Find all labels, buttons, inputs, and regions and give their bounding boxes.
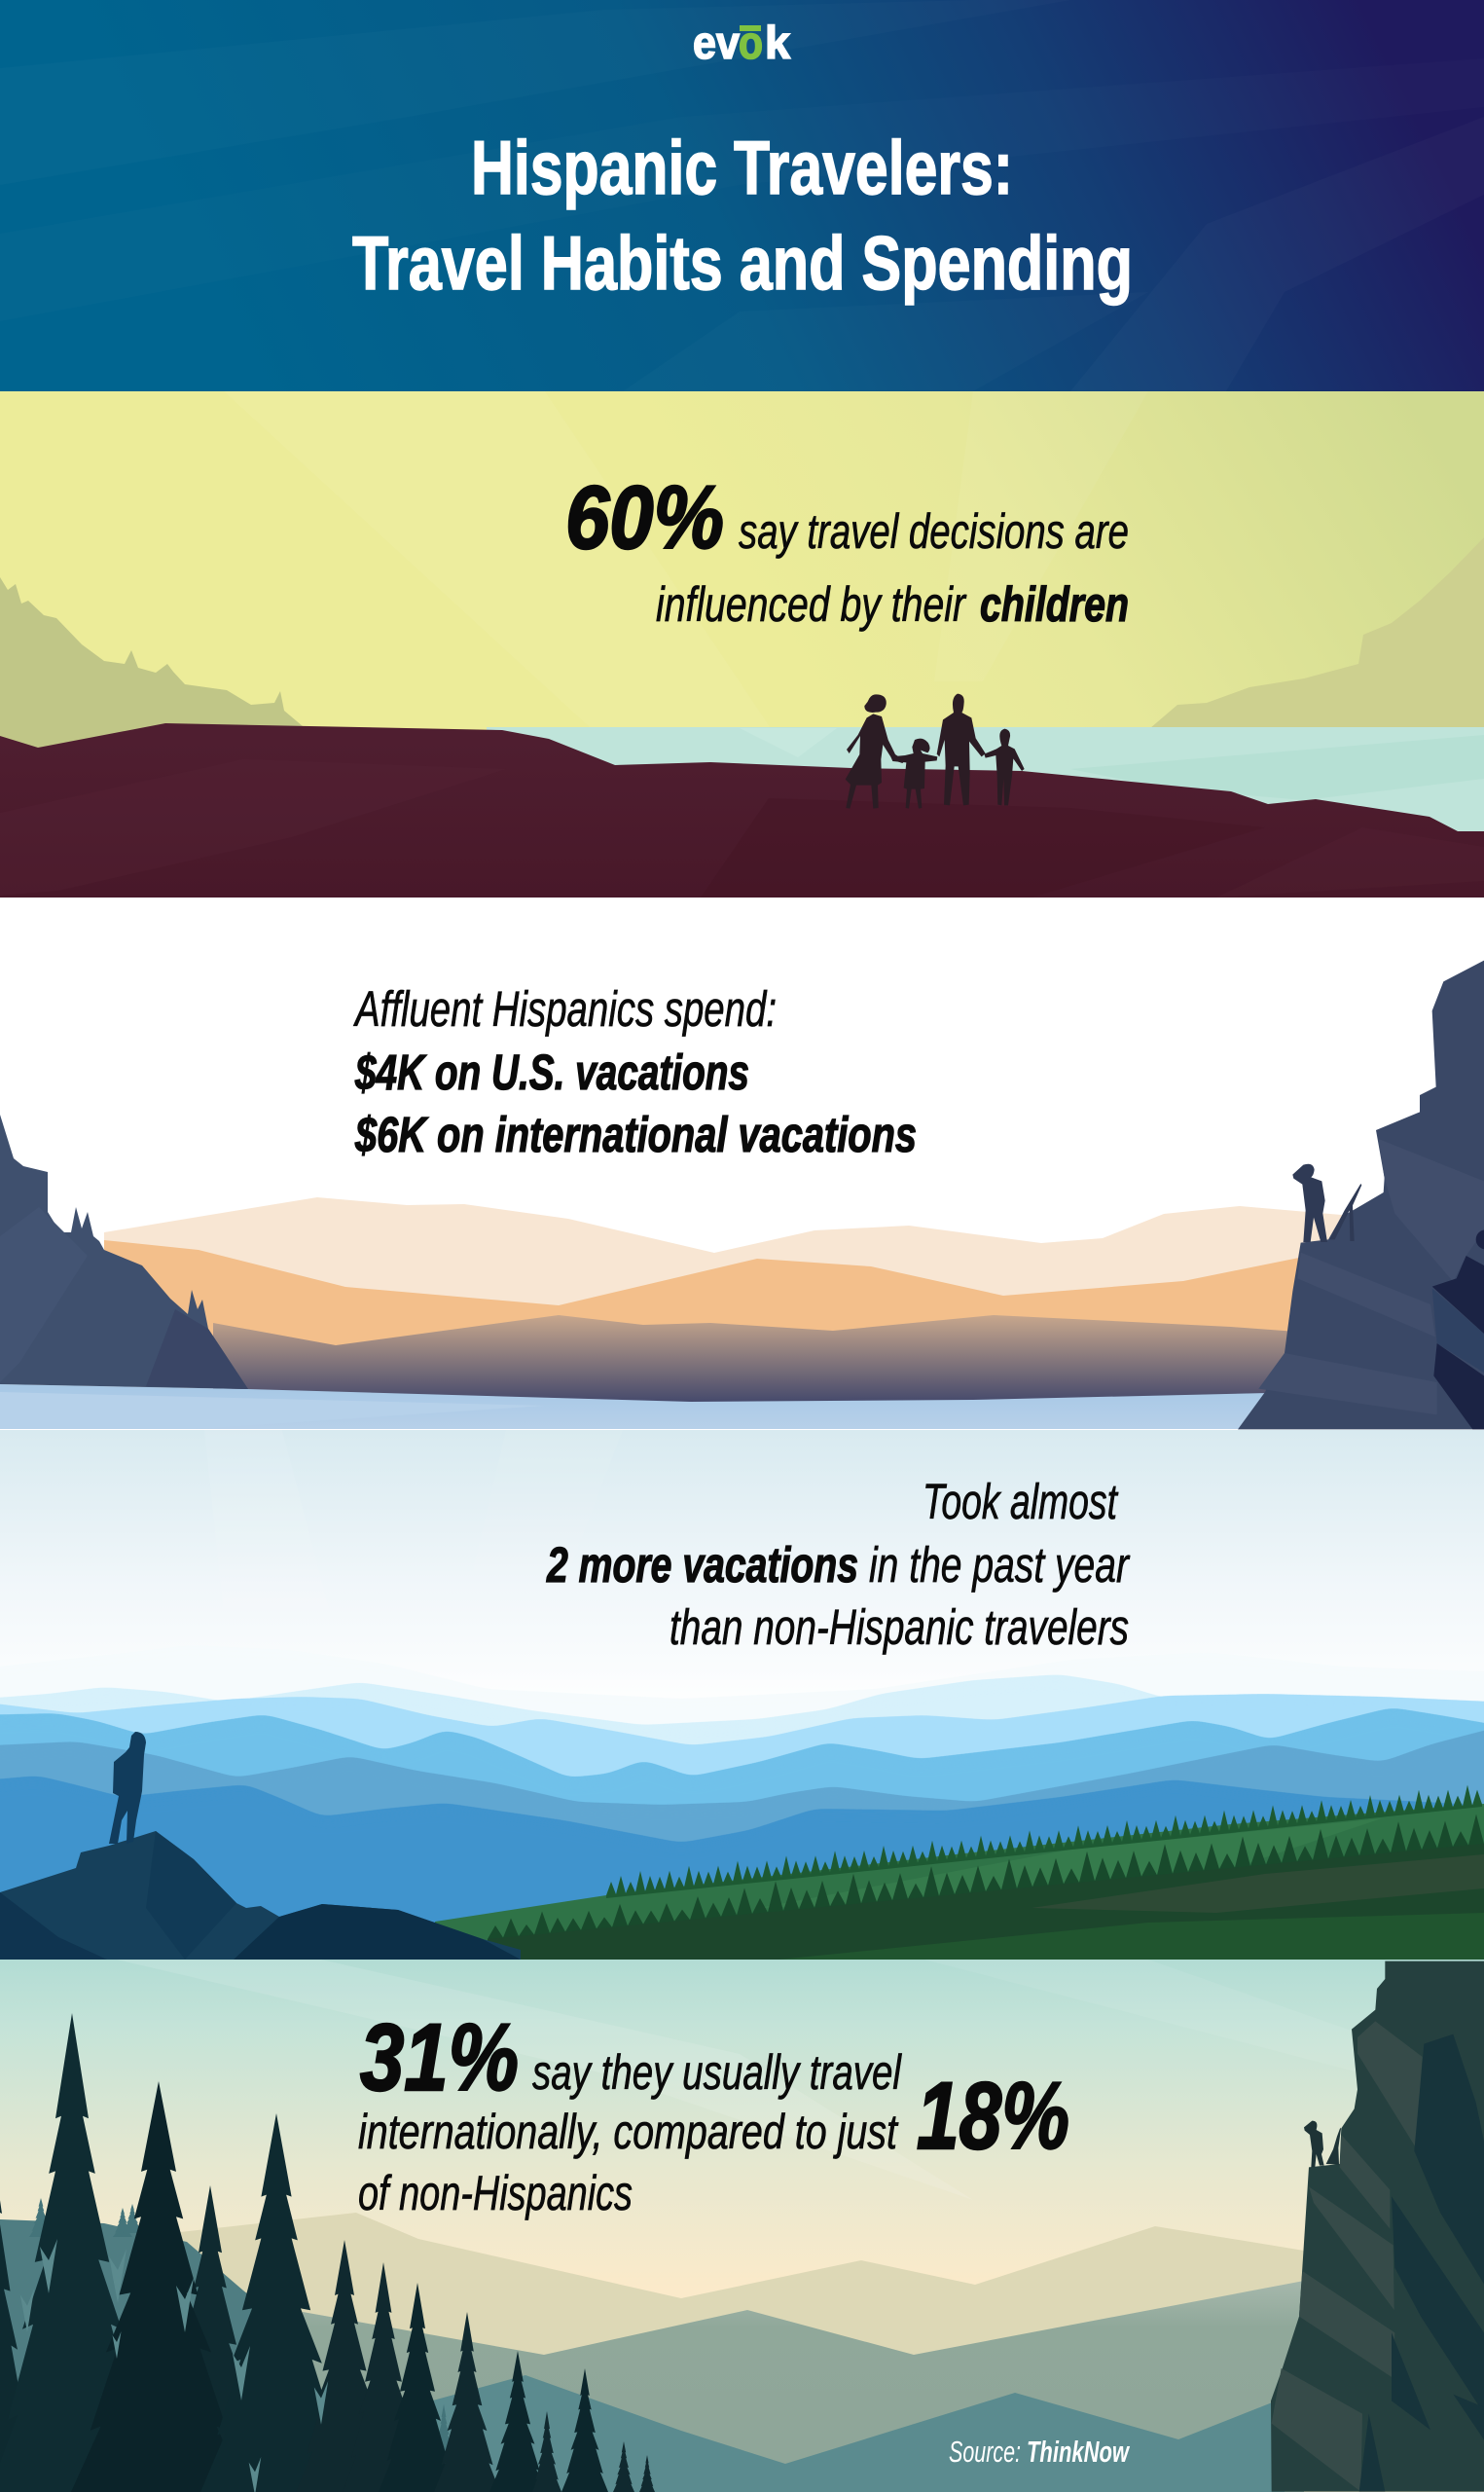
stat text: vacations: [546, 1474, 1131, 1655]
stat text: spending: $6K on international vacations: [354, 1107, 917, 1162]
light branch tips: [20, 2239, 328, 2492]
right rock face: [1271, 1961, 1484, 2492]
logo: evok: ev: [693, 17, 740, 68]
stat text: international travel: of non-Hispanics: [358, 2166, 633, 2220]
panel: header: [0, 0, 1484, 391]
header light streaks: [0, 0, 1484, 391]
stat text: vacations: than non-Hispanic travelers: [670, 1599, 1129, 1655]
title: Travel Habits and Spending: [352, 220, 1133, 306]
stat text: 60% children: [565, 468, 1129, 632]
stat text: 60% children: children: [980, 577, 1129, 632]
stat text: vacations: in the past year: [869, 1537, 1131, 1593]
stat text: international travel: 18%: [917, 2063, 1069, 2169]
background pines: [29, 2198, 455, 2463]
source note: Source:: [949, 2435, 1021, 2469]
stat text: spending: [353, 981, 917, 1162]
logo: evok: o: [739, 17, 763, 68]
stat text: 60% children: 60%: [565, 468, 724, 568]
boy: [984, 729, 1025, 805]
hiker with backpack: [109, 1732, 146, 1844]
stat text: 60% children: say travel decisions are: [739, 504, 1129, 559]
family silhouette: [846, 694, 1025, 809]
stat text: international travel: 31%: [360, 2004, 519, 2110]
palest hills: [0, 1645, 1484, 1742]
sky blue hills: [0, 1707, 1484, 1820]
title: [352, 125, 1133, 306]
pale blue hills: [0, 1674, 1484, 1762]
left cliff: [0, 1115, 248, 1389]
stat text: international travel: [358, 2004, 1069, 2220]
front tree row: [488, 1814, 1484, 1960]
front mountains: [213, 1315, 1297, 1407]
rocky outcrop: [0, 1831, 521, 1960]
sky rays: [224, 391, 1148, 740]
right distant hills: [1150, 537, 1484, 728]
stat text: spending: Affluent Hispanics spend:: [353, 981, 777, 1037]
stat text: 60% children: influenced by their: [656, 577, 967, 632]
logo: evok: [693, 17, 791, 68]
light blue hills: [0, 1694, 1484, 1781]
right cliff: [1238, 961, 1484, 1429]
left distant hills: [0, 577, 303, 750]
climber on ledge: [1304, 2121, 1341, 2167]
lake: [0, 1384, 1268, 1429]
foreground land: [0, 723, 1484, 898]
panel: 60% children: [0, 391, 1484, 898]
panel: more vacations: [0, 1430, 1484, 1986]
panel: affluent spending: [0, 898, 1484, 1430]
back mountains: [104, 1197, 1353, 1382]
mid blue hills: [0, 1723, 1484, 1859]
stat text: international travel: internationally, compared to just: [358, 2105, 899, 2159]
middle mountains: [303, 2281, 1304, 2492]
water: [487, 727, 1484, 847]
pine forest: [0, 2013, 655, 2492]
logo: evok: k: [765, 17, 791, 68]
middle mountains: [104, 1240, 1304, 1382]
stat text: vacations: Took almost: [923, 1474, 1118, 1529]
back tree row: [606, 1785, 1482, 1898]
deep blue hills: [0, 1776, 1484, 1986]
girl: [890, 739, 937, 809]
stat text: international travel: say they usually travel: [532, 2045, 902, 2100]
title: Hispanic Travelers:: [471, 125, 1013, 210]
sky rays: [204, 1430, 623, 1635]
sky rays: [117, 1960, 1362, 2200]
source note: ThinkNow: [1027, 2435, 1130, 2469]
stat text: spending: $4K on U.S. vacations: [354, 1044, 749, 1100]
stat text: vacations: 2 more vacations: [546, 1537, 858, 1593]
panel: international travel: [0, 1960, 1484, 2492]
dark teal left mountain: [0, 2219, 311, 2492]
father: [937, 694, 986, 805]
mother: [846, 694, 905, 809]
near teal mountains: [418, 2375, 1285, 2492]
green hillside: [435, 1804, 1484, 1960]
hiker with raised arm: [1292, 1164, 1361, 1242]
source note: [949, 2435, 1130, 2469]
far mountains: [180, 2213, 1304, 2492]
dark foreground slope: [488, 1844, 1484, 1960]
